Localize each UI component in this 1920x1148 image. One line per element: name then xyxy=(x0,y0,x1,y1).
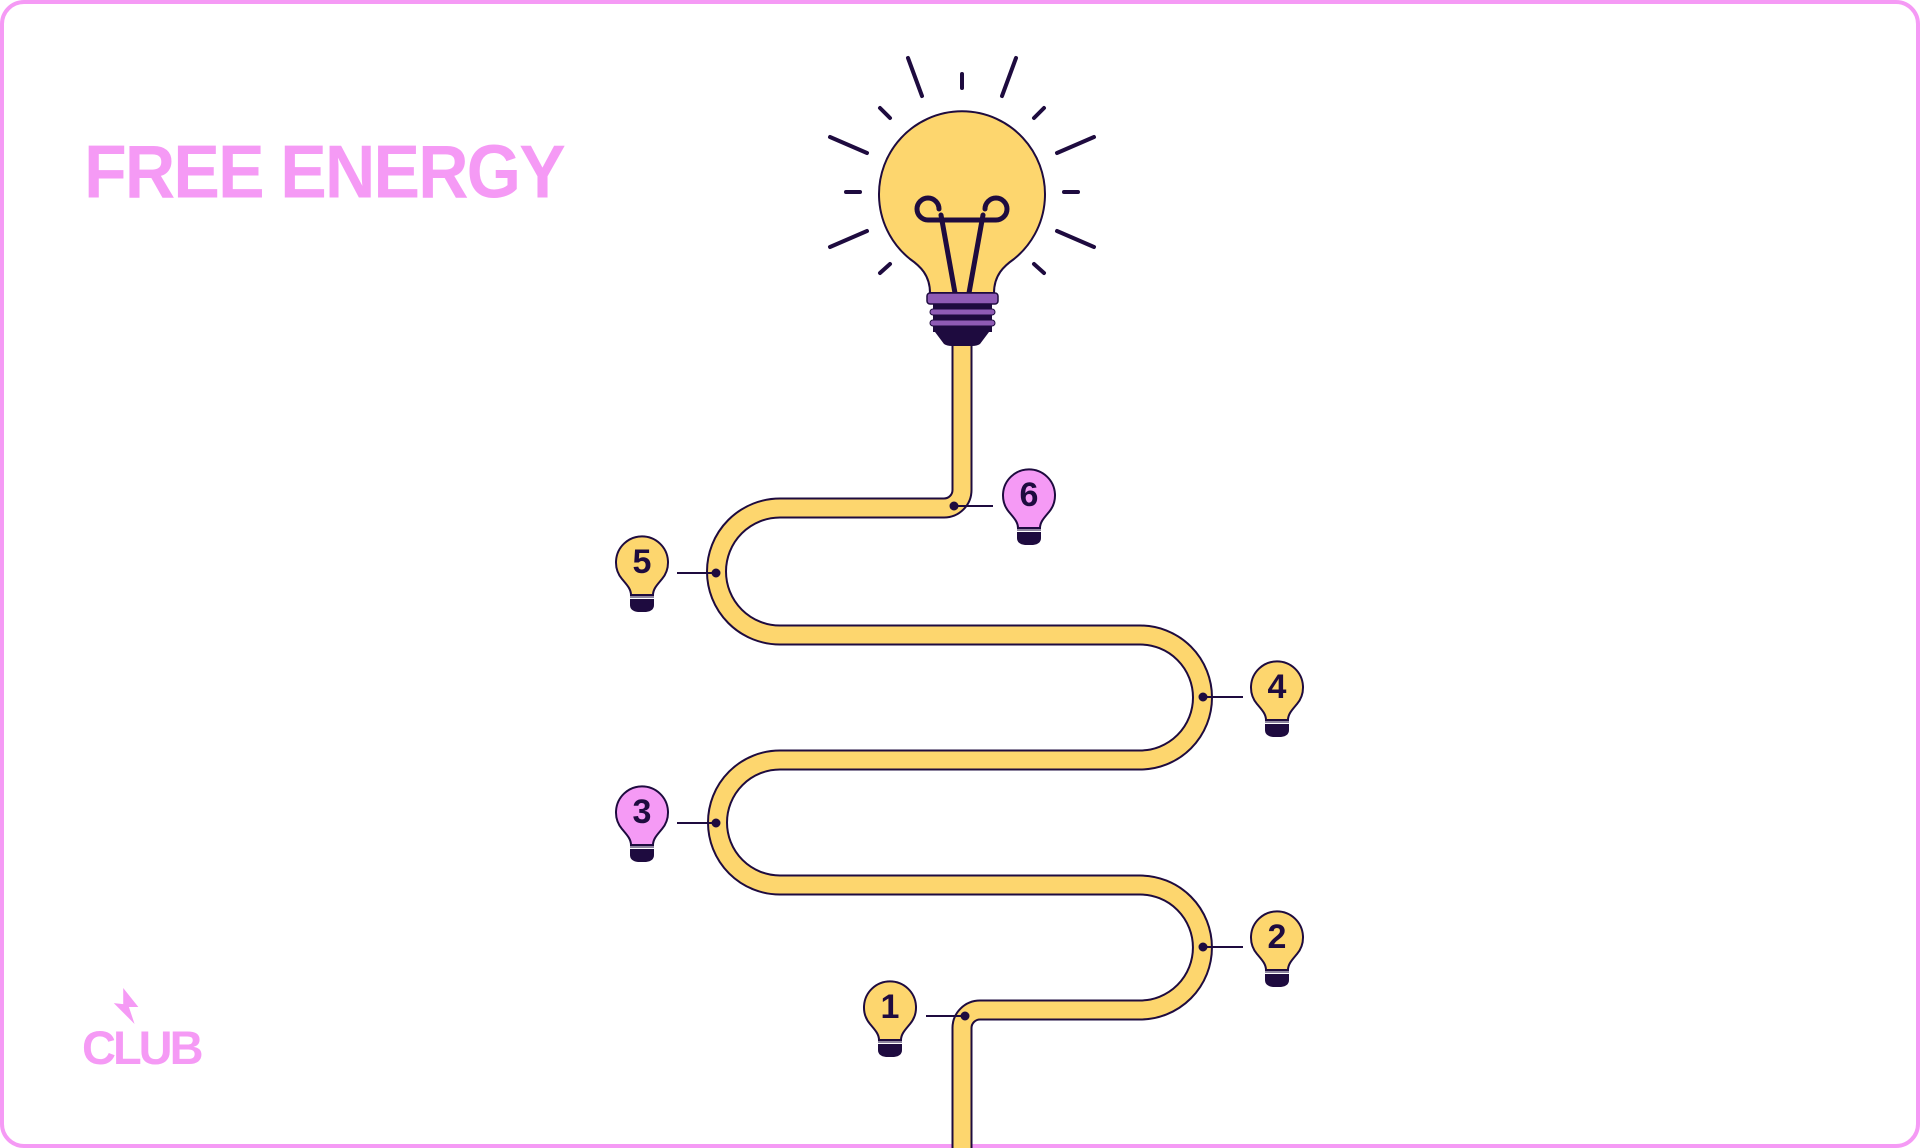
month labels: MONTH xyxy=(596,750,662,770)
connectors xyxy=(677,502,1243,1020)
month labels: MONTH xyxy=(1228,874,1294,894)
filament xyxy=(917,198,1007,293)
text block: free energy streak: Free Energy Streak xyxy=(1198,280,1562,324)
title line 2: FREE ENERGY xyxy=(84,130,564,214)
bulb 5 xyxy=(616,536,668,612)
winding path xyxy=(716,340,1203,1148)
bulb 2 xyxy=(1251,911,1303,987)
text block: starter streak: Starter Streak xyxy=(189,677,451,721)
title xyxy=(84,70,565,214)
month labels: MONTH xyxy=(596,500,662,520)
logo CLUB: CLUB xyxy=(82,1021,201,1074)
logo xyxy=(82,936,247,1074)
logo text xyxy=(82,940,272,1020)
bulb 1: 1 xyxy=(881,988,899,1026)
month labels: MONTH xyxy=(850,942,916,962)
month labels xyxy=(596,430,1294,962)
title line 1: HOW TO EARN xyxy=(84,70,505,137)
text block: free energy streak xyxy=(1130,278,1630,468)
bulb 3 xyxy=(616,786,668,862)
icon: lightning bolt xyxy=(114,988,138,1024)
month labels: MONTH xyxy=(1228,624,1294,644)
bulb 3: 3 xyxy=(633,793,651,831)
logo text: ENERGY xyxy=(82,976,247,1023)
rays xyxy=(830,58,1094,273)
bulb 1 xyxy=(864,981,916,1057)
bulb 4 xyxy=(1251,661,1303,737)
text block: achiever points: Earn 4 Achiever Points xyxy=(1404,888,1816,930)
text block: free energy streak: Get month after month of free energy for as long as you keep your streak alive xyxy=(1150,342,1610,461)
month labels: MONTH xyxy=(985,430,1051,450)
text block: starter streak: Get 1 month of free energy xyxy=(153,735,487,766)
bulb 5: 5 xyxy=(633,543,651,581)
text block: achiever points xyxy=(1370,885,1850,1065)
text block: achiever points: every month to build your streak (as little as 2 new customers) xyxy=(1387,947,1833,1022)
bulb 2: 2 xyxy=(1268,918,1286,956)
bulb 6: 6 xyxy=(1020,476,1038,514)
bulb 6 xyxy=(1003,469,1055,545)
logo text: FREE xyxy=(82,936,186,983)
text block: starter streak xyxy=(100,675,540,775)
bulb 4: 4 xyxy=(1268,668,1287,706)
icon: big light bulb xyxy=(830,58,1094,346)
